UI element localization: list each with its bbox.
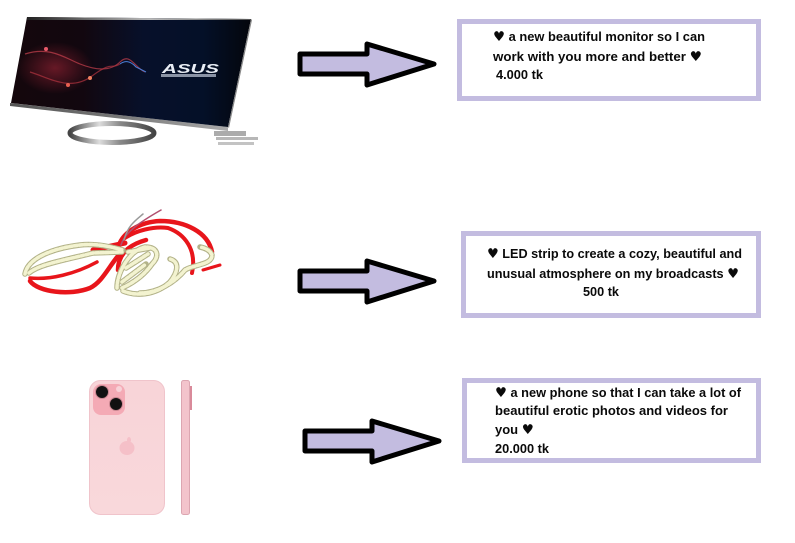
monitor stand (70, 124, 154, 142)
box 3 text: you ♥ (495, 422, 534, 438)
box 2 text (487, 246, 742, 299)
monitor badge (214, 131, 258, 145)
phone side (182, 380, 190, 514)
box 3 text (495, 385, 742, 456)
box 1 (460, 22, 758, 98)
lens 2 (110, 398, 122, 410)
box 3 text: ♥ a new phone so that I can take a lot of (495, 385, 742, 401)
apple logo (120, 437, 134, 455)
icon: phone (90, 380, 192, 514)
phone back (90, 380, 164, 514)
monitor logo: ASUS (160, 61, 220, 76)
arrow 2 (300, 261, 434, 302)
icon: monitor (10, 17, 258, 145)
box 2 text: ♥ LED strip to create a cozy, beautiful and (487, 246, 742, 262)
box 2 (464, 234, 758, 316)
arrow 3 (305, 421, 439, 462)
LED coils (25, 244, 212, 294)
camera bump (93, 384, 125, 415)
box 1 text: 4.000 tk (496, 67, 544, 82)
box 2 text: 500 tk (583, 284, 620, 299)
box 1 text (492, 29, 705, 82)
box 3 (464, 380, 758, 460)
icon: LED strip (25, 210, 220, 294)
strip wires (121, 210, 161, 245)
arrow 1 (300, 44, 434, 85)
box 1 text: work with you more and better ♥ (492, 49, 702, 65)
red ribbon (30, 221, 220, 292)
box 2 text: unusual atmosphere on my broadcasts ♥ (487, 266, 739, 282)
box 3 text: 20.000 tk (495, 441, 550, 456)
lens 1 (96, 386, 108, 398)
box 3 text: beautiful erotic photos and videos for (495, 403, 728, 418)
box 1 text: ♥ a new beautiful monitor so I can (493, 29, 705, 45)
